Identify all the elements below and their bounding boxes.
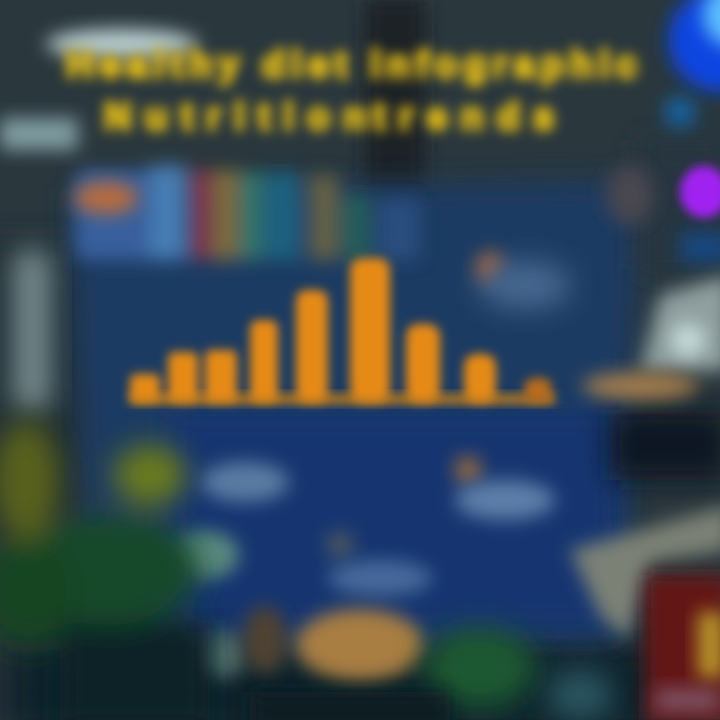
small icons and text blocks in panel xyxy=(476,252,504,284)
purple blob xyxy=(606,165,654,225)
bottom-right frame xyxy=(570,505,720,640)
left light column xyxy=(12,250,52,410)
blue central panel xyxy=(70,180,640,650)
top-right blue orb xyxy=(668,0,720,92)
rainbow panel xyxy=(75,165,420,260)
bread shape xyxy=(243,606,287,674)
chart baseline xyxy=(130,394,555,404)
foliage left xyxy=(0,420,210,720)
bar chart xyxy=(130,258,552,402)
title line 1: Healthy diet infographic xyxy=(66,44,643,86)
title line 2: Nutrition trends xyxy=(104,96,567,138)
right laptop and desk xyxy=(640,275,720,372)
foliage bottom xyxy=(424,628,536,708)
